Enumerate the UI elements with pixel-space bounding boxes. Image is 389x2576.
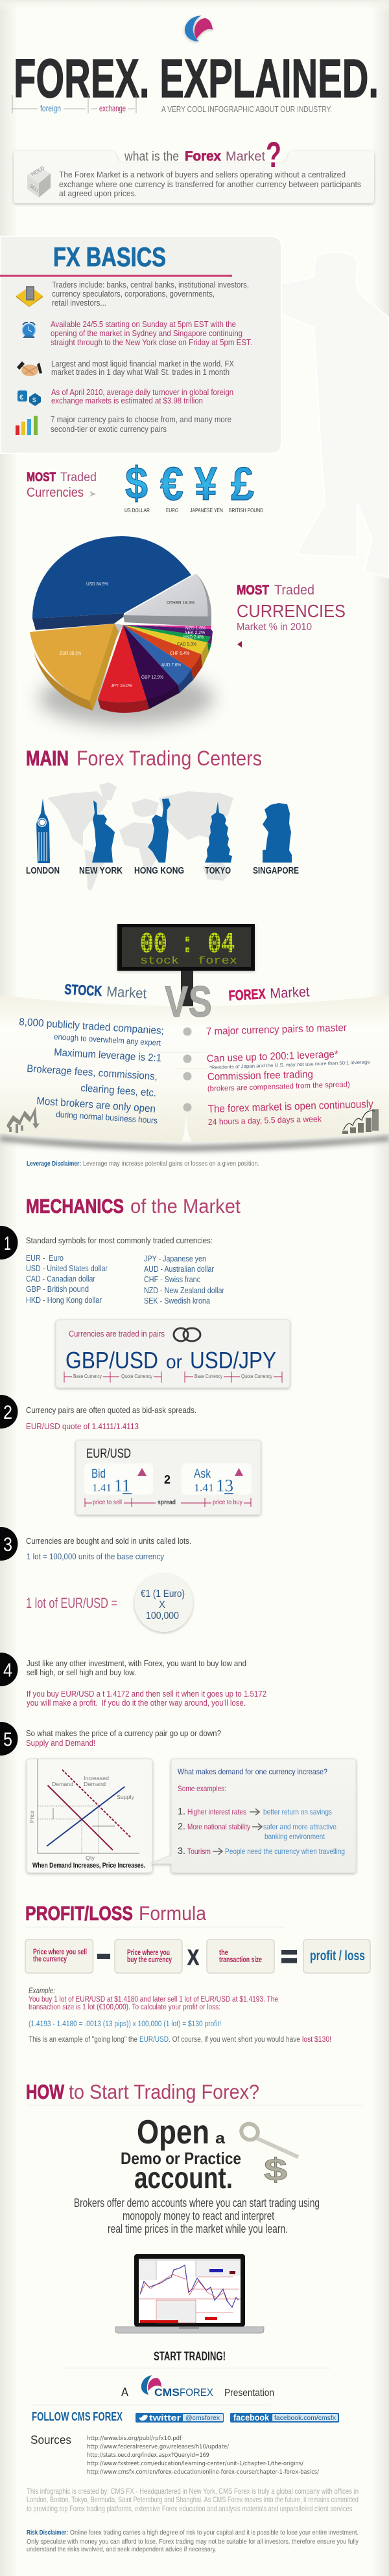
list: forex market points: The forex market is open continuously [208,1098,374,1115]
list: stock market points: during normal business hours [56,1109,158,1125]
text: demo accounts description: monopoly money to react and interpret [123,2209,274,2222]
step 3 number [0,1527,18,1561]
heading: what is the forex market: ? [266,134,281,175]
badge: twitter: @cmsforex [185,2415,220,2422]
callout: one lot bubble: €1 (1 Euro) [141,1588,185,1599]
panel: stock vs forex paper banner [0,995,389,1151]
icon: Statue of Liberty, New York [92,800,115,863]
panel: supply and demand chart: Price [29,1811,35,1823]
spread number: 2 [164,1473,171,1486]
heading: how to start trading forex: HOW [26,2080,64,2103]
formula: minus [97,1954,110,1959]
text: forex market definition: exchange where one currency is transferred for another currency between participants [59,179,361,189]
list: stock market points: clearing fees, etc. [80,1083,157,1099]
formula: profit or loss box [303,1939,370,1973]
icon: currency symbols: $ [125,458,148,508]
panel: EUR/USD quote [76,1440,261,1515]
step 3 number: 3 [3,1534,12,1555]
panel: supply and demand chart: Qty [86,1855,95,1861]
icon: currency dice: $ [32,397,36,404]
step 1 number: 1 [4,1233,11,1254]
panel: what makes demand increase [151,1759,356,1873]
text: profit example: Example: [29,1987,55,1995]
heading: most traded currencies: Traded [60,470,97,484]
list: currency symbols right: JPY - Japanese yen [144,1254,206,1263]
text: forex market definition: at agreed upon prices. [59,188,137,198]
icon: rising coin stacks [342,1109,379,1134]
base and quote annotations: Base Currency [194,1373,222,1379]
text: standard symbols: Standard symbols for most commonly traded currencies: [26,1236,213,1245]
brand line: a CMS Forex presentation [121,2375,274,2399]
list: forex market points: Commission free trading [207,1069,313,1083]
price and spread annotations: price to buy [213,1499,242,1506]
panel: supply and demand chart [27,1759,152,1873]
base and quote annotations [64,1372,282,1383]
list: source links: http://stats.oecd.org/index.aspx?QueryId=169 [87,2452,209,2459]
text: leverage disclaimer [27,1160,259,1168]
heading: stock market [64,981,147,1002]
currency labels: US DOLLAR [124,508,150,514]
panel: what makes demand increase: Some examples: [178,1784,226,1793]
list: forex market points: (brokers are compensated from the spread) [207,1081,350,1093]
pair examples [65,1347,276,1373]
text: currency pairs [51,415,231,434]
text: profit example: EUR/USD [139,2036,169,2044]
heading: forex market: Market [270,983,310,1002]
list: source links: http://www.bis.org/publ/rpfx10.pdf [87,2435,182,2442]
silhouette: presenter figure [235,253,389,578]
pair examples: or [166,1351,182,1373]
panel: supply and demand chart: Demand [52,1781,73,1787]
pie slice labels: CAD 5.3% [177,641,196,647]
text: buy low sell high [27,1659,266,1708]
text: bid-ask spreads: Currency pairs are often quoted as bid-ask spreads. [26,1406,196,1415]
example 2: More national stability [187,1822,250,1831]
panel: EUR/USD quote: EUR/USD [86,1447,131,1461]
icon: hold sell cube: SELL [29,184,40,194]
list: currency symbols left: USD - United States dollar [26,1264,108,1273]
text: buy low sell high: you will make a profit. If you do it the other way around, you'll lose. [27,1699,246,1708]
text: traded in pairs: Currencies are traded in pairs [69,1329,165,1339]
heading: most traded currencies [27,470,97,500]
text: currency pairs: 7 major currency pairs to choose from, and many more [51,415,231,424]
heading: open a demo or practice account [121,2114,241,2195]
scoreboard: stock vs forex clock: forex [198,955,237,967]
text: turnover: As of April 2010, average daily turnover in global foreign [51,388,233,397]
tagline: A VERY COOL INFOGRAPHIC ABOUT OUR INDUSTRY. [161,105,332,114]
call to action: start trading: START TRADING! [154,2350,226,2364]
formula: profit or loss box: profit / loss [310,1949,365,1963]
comparison bullets [183,1027,192,1111]
text: traders: currency speculators, corporations, governments, [52,289,215,299]
pie slice labels: OTHER 18.6% [167,600,194,605]
icon: currency dice [18,390,41,406]
bid card: Bid [91,1467,106,1481]
pie slice labels: USD 84.9% [86,581,108,587]
formula: transaction size box: the [219,1949,228,1957]
icon: CMS Forex logo [141,2375,213,2399]
panel: supply and demand chart: Increased [84,1775,109,1781]
panel: supply and demand chart: Demand [84,1781,106,1787]
heading: follow CMS Forex: FOLLOW CMS FOREX [32,2410,123,2423]
heading: mechanics of the market: MECHANICS [26,1195,124,1217]
icon: currency symbols: ¥ [194,458,217,510]
ask card: Ask [194,1467,211,1481]
list: source links: http://www.fxstreet.com/education/learning-center/unit-1/chapter-1/the-origins/ [87,2461,304,2467]
icon: falling arrow with figures [6,1107,40,1133]
step 1 number [0,1226,18,1260]
world map [47,782,233,890]
panel: what is the forex market [14,134,374,203]
example 2: banking environment [265,1832,325,1841]
labels: trading center cities [26,865,299,876]
icon: silver dollar key: $ [264,2153,287,2187]
text: risk disclaimer: Risk Disclaimer: [27,2529,68,2536]
price and spread annotations: spread [158,1499,176,1506]
example 2: 2. [178,1821,185,1832]
pie slice labels: NZD 1.6% [185,625,206,631]
labels: trading center cities: LONDON [26,865,60,876]
bid card [84,1463,153,1495]
list: stock market points [19,1017,164,1125]
currency labels: EURO [166,508,178,514]
text: lots: Currencies are bought and sold in units called lots. [26,1537,191,1546]
heading: mechanics of the market [26,1195,241,1217]
text: supply and demand: Supply and Demand! [26,1739,95,1748]
icon: brand logo [185,16,213,41]
list: stock market points: 8,000 publicly traded companies; [19,1017,164,1037]
pie slice labels: HKD 2.4% [183,634,204,640]
heading: what is the forex market: Forex [185,149,221,164]
heading: profit/loss formula: Formula [139,1902,207,1925]
currency labels: BRITISH POUND [229,508,263,514]
icon: hold sell cube: HOLD [30,165,45,177]
formula: buy price box [115,1939,182,1973]
formula: times: X [187,1945,199,1969]
example 1: 1. [178,1806,185,1817]
heading: what is the forex market: what is the [124,150,179,164]
heading: forex market [228,983,310,1004]
labels: trading center cities: HONG KONG [134,865,184,876]
list: forex market points [206,1022,374,1127]
icon: building on yellow base [16,286,43,307]
example 1: better return on savings [263,1807,332,1816]
list: stock market points: Maximum leverage is 2:1 [54,1047,162,1064]
heading: most traded currencies: MOST [27,470,56,484]
pair examples: GBP/USD [65,1347,158,1373]
text: lots [26,1537,191,1561]
icon: linked rings [174,1328,200,1341]
formula: transaction size box: transaction size [219,1956,262,1964]
list: source links: http://www.federalreserve.gov/releases/h10/update/ [87,2444,230,2450]
text: one lot equation: 1 lot of EUR/USD = [26,1595,117,1611]
list: currency symbols right: NZD - New Zealand dollar [144,1286,224,1295]
panel: what makes demand increase: What makes demand for one currency increase? [178,1767,327,1776]
icon: handshake [17,361,42,376]
list: forex market points: Can use up to 200:1 leverage* [207,1049,338,1065]
badge: twitter: twitter [149,2413,181,2423]
pie slice labels: GBP 12.9% [141,674,163,680]
example 1 [178,1806,332,1817]
heading: most traded currencies market share: Traded [274,583,314,598]
panel: supply and demand chart: Supply [117,1794,135,1800]
text: forex market definition [59,170,361,198]
step 4 number: 4 [3,1660,12,1681]
text: profit example: lost $130! [302,2036,331,2044]
formula: transaction size box [207,1939,274,1973]
formula: sell price box: Price where you sell [33,1949,87,1956]
text: buy low sell high: If you buy EUR/USD a t 1.4172 and then sell it when it goes up to 1.5172 [27,1689,266,1699]
price and spread annotations [85,1498,251,1507]
text: profit example: You buy 1 lot of EUR/USD at $1.4180 and later sell 1 lot of EUR/USD at $1.4193. The [29,1996,278,2004]
base and quote annotations: Quote Currency [241,1373,272,1379]
list: currency symbols right: AUD - Australian dollar [144,1265,214,1274]
pie slice labels: SEK 2.2% [185,629,205,635]
icon: bar graph [16,416,38,435]
example 3 [178,1846,345,1857]
icon: currency symbols: £ [231,458,254,510]
heading: forex market: FOREX [228,986,266,1004]
pie slice labels: EUR 39.1% [60,650,81,656]
icon: hold sell cube [27,165,51,198]
text: buy low sell high: Just like any other investment, with Forex, you want to buy low and [27,1659,246,1668]
icon: CMS Forex logo: FOREX [180,2386,213,2399]
formula: sell price box [25,1939,93,1973]
currency labels [124,508,263,514]
formula: equals [281,1950,297,1963]
text: profit example: (1.4193 - 1.4180 = .0013 (13 pips)) x 100,000 (1 lot) = $130 profit! [29,2020,221,2028]
ask card [182,1463,252,1495]
text: leverage disclaimer: Leverage Disclaimer: [27,1160,81,1168]
badge: facebook: facebook [233,2412,269,2423]
text: liquidity: Largest and most liquid financial market in the world. FX [51,359,235,368]
callout: one lot bubble [135,1574,193,1632]
list: currency symbols right: SEK - Swedish krona [144,1296,210,1305]
foreign exchange annotation [12,95,136,113]
text: risk disclaimer [27,2529,359,2553]
list: stock market points: enough to overwhelm any expert [54,1032,161,1048]
list: stock market points: Most brokers are only open [36,1095,156,1115]
panel: currency pairs [56,1320,290,1388]
pie slice labels [60,581,206,688]
text: buy low sell high: sell high, or sell high and buy low. [27,1668,136,1677]
pie slice labels: AUD 7.6% [161,662,181,668]
example 2: safer and more attractive [263,1822,336,1831]
list: currency symbols left: EUR - Euro [26,1254,64,1263]
scoreboard: stock vs forex clock: 00 : 04 [140,929,235,961]
pair examples: USD/JPY [190,1347,276,1373]
example 2 [178,1821,336,1841]
list: stock market points: Brokerage fees, commissions, [27,1063,158,1083]
text: bid-ask spreads [26,1406,196,1431]
text: demo accounts description: Brokers offer demo accounts where you can start trading using [74,2197,320,2209]
icon: silver dollar key [239,2121,298,2187]
text: forex market definition: The Forex Market is a network of buyers and sellers operating without a centralized [59,170,346,179]
text: traders: retail investors... [52,299,106,308]
heading: VS: VS [165,977,212,1026]
pie slice labels: JPY 19.0% [111,683,132,688]
text: bid-ask spreads: EUR/USD quote of 1.4111/1.4113 [26,1422,139,1431]
text: turnover [51,388,233,405]
icon: currency symbols: € [160,458,183,510]
heading: stock market: Market [106,983,147,1002]
text: currency pairs: second-tier or exotic currency pairs [51,425,167,434]
ask card: 13 [216,1476,233,1495]
example 3: People need the currency when travelling [225,1847,345,1856]
text: leverage disclaimer: Leverage may increase potential gains or losses on a given position. [83,1160,259,1168]
heading: how to start trading forex: to Start Trading Forex? [69,2080,259,2103]
icon: laptop with trading chart [115,2254,264,2333]
heading: profit/loss formula: PROFIT/LOSS [25,1902,133,1925]
heading: open a demo or practice account: account. [134,2161,233,2195]
step 5 number [0,1722,18,1756]
callout: one lot bubble: 100,000 [146,1610,179,1621]
price and spread annotations: price to sell [93,1499,122,1506]
text: profit example [29,1987,331,2044]
formula: buy price box: buy the currency [127,1956,172,1964]
base and quote annotations: Base Currency [73,1373,102,1379]
heading: stock market: STOCK [64,981,102,999]
base and quote annotations: Quote Currency [121,1373,152,1379]
example 1: Higher interest rates [187,1807,246,1816]
currency labels: JAPANESE YEN [190,508,223,514]
text: traders: Traders include: banks, central banks, institutional investors, [52,280,249,289]
formula: buy price box: Price where you [127,1949,170,1957]
text: profit example: This is an example of "going long" the [29,2036,137,2044]
heading: what is the forex market [124,134,281,175]
text: demo accounts description: real time prices in the market while you learn. [108,2222,288,2235]
callout: one lot bubble: X [159,1599,166,1610]
scoreboard: stock vs forex clock [117,924,255,1006]
panel: supply and demand chart: When Demand Increases, Price Increases. [32,1862,145,1870]
step 5 number: 5 [3,1729,12,1750]
heading: main forex trading centers: MAIN [26,747,69,770]
list: forex market points: 7 major currency pairs to master [206,1022,348,1037]
step 2 number [0,1395,18,1429]
list: source links: http://www.cmsfx.com/en/forex-education/online-forex-course/chapter-1-forex-basics/ [87,2469,320,2476]
bid card: 1.41 [92,1482,112,1494]
heading: what is the forex market: Market [226,150,265,164]
brand line: a CMS Forex presentation: A [121,2386,128,2399]
text: availability: opening of the market in Sydney and Singapore continuing [51,329,242,338]
text: profit example: transaction size is 1 lot (€100,000). To calculate your profit or loss: [29,2004,220,2011]
text: liquidity [51,359,235,377]
example 3: Tourism [187,1847,211,1856]
heading: most traded currencies market share: MOST [237,583,269,598]
list: currency symbols left: CAD - Canadian dollar [26,1274,95,1283]
brand line: a CMS Forex presentation: Presentation [224,2388,274,2399]
heading rule [0,275,232,277]
heading: most traded currencies market share [237,583,346,648]
icon: Merlion, Singapore [263,803,292,863]
heading: FX basics: FX BASICS [53,242,166,272]
heading: most traded currencies market share: CURRENCIES [237,601,346,621]
labels: trading center cities: NEW YORK [79,865,123,876]
labels: trading center cities: TOKYO [205,865,231,876]
text: lots: 1 lot = 100,000 units of the base currency [27,1552,165,1561]
foreign exchange annotation: foreign [40,103,61,113]
icon: currency dice: € [19,394,23,401]
text: profit example: . Of course, if you went short you would have [169,2036,300,2044]
text: supply and demand [26,1729,221,1748]
badge: facebook [230,2412,339,2423]
text: traders [52,280,249,308]
foreign exchange annotation: exchange [99,103,126,113]
icon: pagoda, Tokyo [205,802,232,863]
icon: statue, Hong Kong [148,798,171,863]
example 3: 3. [178,1846,185,1857]
text: availability [51,320,252,347]
step 4 number [0,1653,18,1686]
list: forex market points: 24 hours a day, 5.5 days a week [208,1114,322,1127]
icon: Big Ben, London [36,798,50,863]
scoreboard: stock vs forex clock: stock [140,955,179,967]
text: liquidity: market trades in 1 day what Wall St. trades in 1 month [51,368,230,377]
list: currency symbols left [26,1254,108,1305]
heading: open a demo or practice account: Open [137,2114,209,2151]
sources heading: Sources [30,2434,71,2446]
icon: CMS Forex logo: CMS [154,2386,180,2399]
list: source links [87,2435,320,2476]
text: about CMS Forex [27,2487,359,2513]
heading: main forex trading centers: Forex Trading Centers [77,747,262,770]
text: risk disclaimer: understand the risks involved, and seek independent advice if necessary. [27,2546,217,2553]
list: forex market points: *Residents of Japan and the U.S. may not use more than 50:1 leverage [209,1059,370,1070]
formula: sell price box: the currency [33,1956,67,1963]
text: availability: Available 24/5.5 starting on Sunday at 5pm EST with the [51,320,236,329]
list: currency symbols left: HKD - Hong Kong dollar [26,1296,102,1305]
heading: most traded currencies: Currencies [27,486,84,500]
list: currency symbols right [144,1254,224,1305]
heading: most traded currencies market share: Market % in 2010 [237,622,312,633]
bid card: 11 [114,1476,130,1495]
text: supply and demand: So what makes the price of a currency pair go up or down? [26,1729,221,1738]
chart: currency market share pie [30,536,214,725]
badge: facebook: facebook.com/cmsfx [274,2415,336,2422]
text: availability: straight through to the New York close on Friday at 5pm EST. [51,338,252,347]
labels: trading center cities: SINGAPORE [253,865,299,876]
pie slice labels: CHF 6.4% [170,650,189,656]
icon: alarm clock [22,322,35,338]
panel: FX basics [0,236,281,453]
badge: twitter [136,2413,224,2423]
step 2 number: 2 [3,1402,12,1423]
heading: mechanics of the market: of the Market [130,1195,241,1217]
list: currency symbols left: GBP - British pound [26,1285,89,1294]
heading: open a demo or practice account: Demo or Practice [121,2149,241,2168]
ask card: 1.41 [194,1482,214,1494]
heading: open a demo or practice account: a [215,2130,226,2147]
text: turnover: exchange markets is estimated at $3.98 trillion [51,396,203,405]
list: currency symbols right: CHF - Swiss franc [144,1275,200,1284]
text: demo accounts description [74,2197,320,2235]
icon: currency symbols [125,458,254,510]
